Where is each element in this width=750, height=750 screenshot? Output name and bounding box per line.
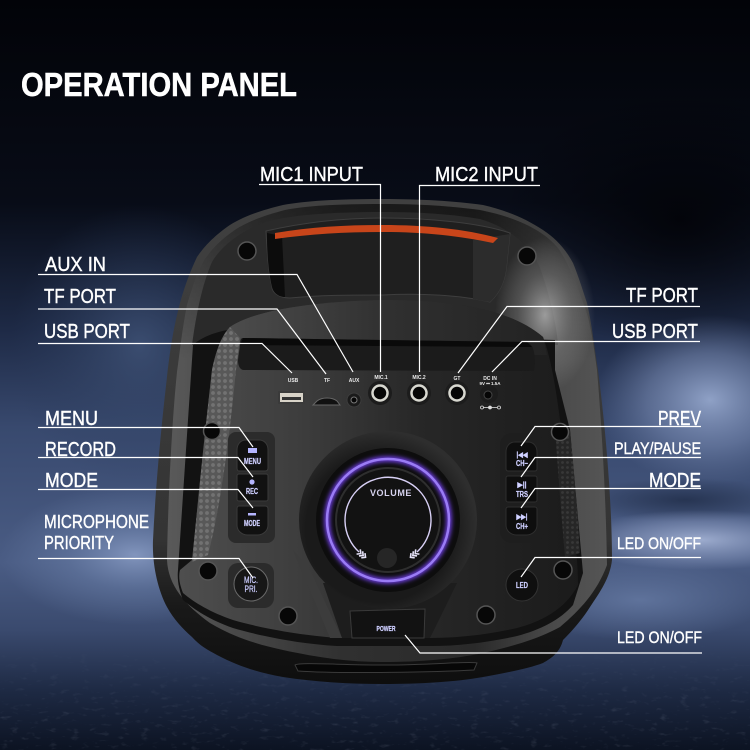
menu button: MENU (244, 457, 261, 466)
volume arc (345, 477, 431, 552)
callout: mode right (521, 470, 701, 508)
play pause button: TRS (516, 490, 528, 499)
slot top shadow (240, 338, 532, 347)
callout: mode left: MODE (45, 470, 98, 492)
prev button (506, 442, 537, 471)
pedestal left highlight (293, 550, 342, 638)
callout: led on off (521, 534, 701, 577)
purple light ring (327, 459, 449, 581)
callout: prev: PREV (658, 408, 702, 430)
upper band shading (178, 204, 596, 360)
power button: POWER (376, 626, 396, 633)
screw holes (199, 242, 572, 625)
callout: menu (38, 408, 253, 447)
callout: led on off: LED ON/OFF (617, 534, 701, 553)
callout: mode right: MODE (649, 470, 701, 492)
callout: tf port right (458, 285, 700, 373)
power button (350, 609, 425, 638)
right shoulder highlight (495, 237, 595, 393)
port labels on panel: GT (454, 376, 460, 382)
right cluster plate (500, 433, 544, 543)
callout: tf port right: TF PORT (626, 285, 698, 307)
play pause button (506, 476, 537, 502)
callout: power led on off: LED ON/OFF (617, 628, 702, 647)
handle left shadow (267, 233, 285, 297)
callout: aux in: AUX IN (45, 254, 106, 276)
port sockets (278, 381, 500, 409)
right button cluster (500, 433, 544, 601)
orange handle strip (275, 225, 498, 243)
mic 1 jack (368, 381, 392, 405)
callout: mode left (38, 470, 253, 508)
purple glow ring (327, 459, 449, 581)
knob cap (336, 468, 440, 572)
left chevrons (357, 549, 367, 560)
control panel plate (179, 300, 578, 638)
usb port (278, 391, 305, 404)
prev button: CH− (516, 459, 528, 468)
knob base pedestal (323, 583, 457, 638)
right chevrons (409, 549, 419, 560)
callout: usb port right: USB PORT (612, 321, 698, 343)
knob indicator nub (377, 548, 397, 568)
callout: power led on off (405, 628, 702, 653)
knob dark well (316, 448, 460, 592)
callout: play pause: PLAY/PAUSE (614, 439, 701, 458)
dc polarity symbol (480, 406, 500, 409)
callout: mic1 input (259, 164, 380, 372)
textured left grip (192, 327, 240, 562)
callout: menu: MENU (45, 408, 98, 430)
callout: aux in (38, 254, 353, 372)
prev button: |◀◀ (516, 452, 528, 459)
menu button (237, 440, 268, 471)
speaker body (153, 199, 612, 684)
callout: microphone priority: MICROPHONE (44, 512, 149, 532)
callout: microphone priority: PRIORITY (44, 533, 114, 553)
callout: record: RECORD (45, 439, 116, 461)
upper interior (192, 212, 558, 345)
volume text: VOLUME (370, 488, 412, 498)
mode button: MODE (244, 519, 260, 528)
black groove (178, 330, 583, 646)
port labels on panel: DC IN (483, 376, 497, 382)
handle right shade (473, 234, 510, 302)
play pause button: ▶|| (517, 482, 527, 489)
knob outer ring (299, 431, 477, 609)
title: OPERATION PANEL (21, 66, 297, 103)
port labels on panel: AUX (349, 378, 360, 384)
callout: microphone priority (38, 512, 253, 578)
mic priority button: MIC. (244, 575, 258, 585)
rec button (237, 474, 268, 501)
rec button: REC (246, 487, 258, 496)
handle recess (266, 218, 510, 302)
tf slot (313, 398, 340, 405)
next button: ▶▶| (516, 514, 528, 521)
callout: prev (521, 408, 702, 446)
mic priority plate (228, 563, 274, 608)
input recess slot (238, 338, 535, 371)
port labels on panel: TF (324, 378, 330, 384)
left button cluster (228, 432, 275, 608)
callout: tf port left: TF PORT (44, 286, 116, 308)
left cluster plate (228, 432, 275, 543)
port labels on panel: MIC.1 (374, 375, 388, 381)
foot grille slot (295, 662, 477, 673)
background: dark sky and blue haze (0, 177, 750, 750)
port labels on panel: USB (288, 378, 299, 384)
port labels on panel: 9V ⎓ 1.5A (479, 381, 501, 386)
mic 2 jack (407, 381, 431, 405)
port labels on panel: MIC.2 (412, 375, 426, 381)
dc socket (480, 385, 498, 403)
speaker outer shell (153, 199, 612, 684)
next button (506, 507, 537, 535)
callout: tf port left (38, 286, 326, 374)
mic priority button (234, 567, 268, 601)
led button: LED (516, 581, 528, 590)
callout: mic1 input: MIC1 INPUT (260, 164, 363, 186)
callout: play pause (521, 439, 701, 477)
aux jack (347, 393, 361, 407)
callout: mic2 input (420, 164, 540, 372)
volume knob (293, 431, 477, 638)
led button (506, 569, 538, 601)
textured upper band (230, 300, 547, 355)
mic priority button: PRI. (244, 584, 258, 594)
port labels on panel (288, 375, 501, 386)
speaker grey band (167, 204, 607, 662)
callout: usb port left: USB PORT (44, 321, 130, 343)
mode button (237, 506, 268, 535)
callout: mic2 input: MIC2 INPUT (435, 164, 538, 186)
callout: usb port right (492, 321, 700, 372)
callout: record (38, 439, 253, 477)
callout: usb port left (38, 321, 292, 373)
guitar jack (445, 381, 469, 405)
next button: CH+ (516, 522, 528, 531)
textured right grip (555, 430, 580, 557)
